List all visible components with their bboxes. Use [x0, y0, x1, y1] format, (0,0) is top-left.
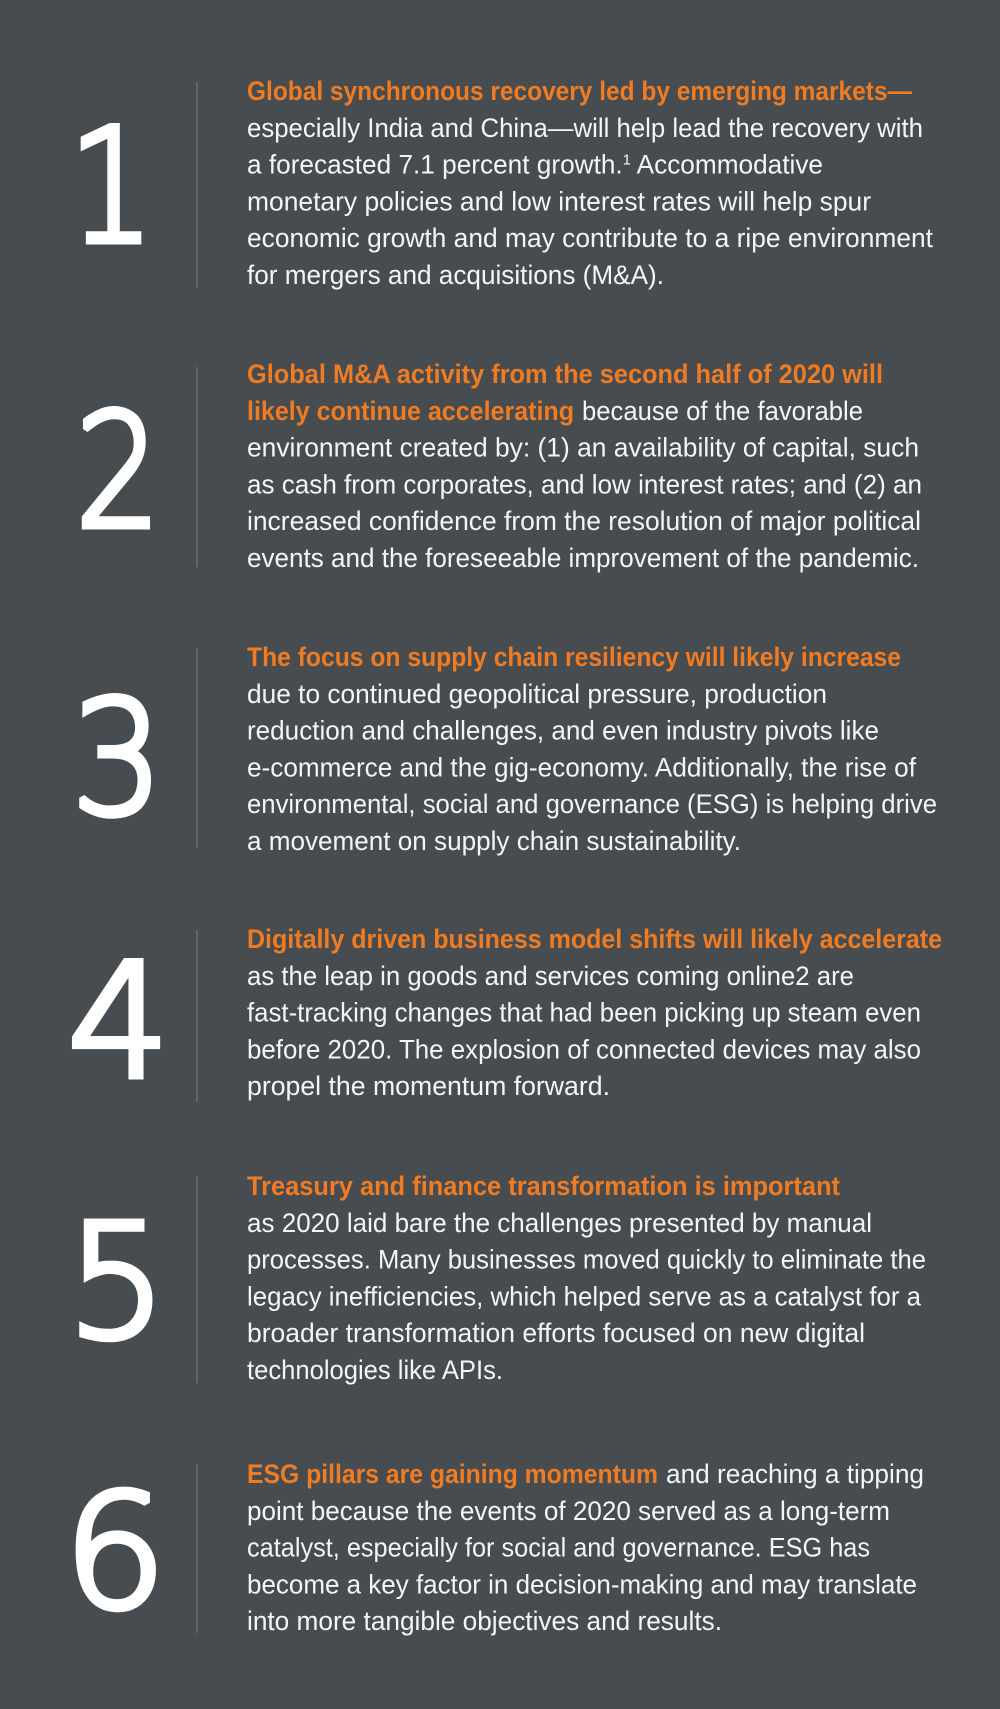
body text 1: a forecasted 7.1 percent growth. — [247, 150, 634, 180]
body text 5 — [247, 1208, 926, 1385]
body text 5: processes. Many businesses moved quickly to eliminate the — [247, 1245, 926, 1275]
body text 1: economic growth and may contribute to a ripe environment — [247, 223, 933, 253]
numeral 4: 4 — [68, 931, 169, 1114]
body text 3: reduction and challenges, and even industry pivots like — [247, 716, 879, 746]
body text 5: legacy inefficiencies, which helped serve as a catalyst for a — [247, 1281, 922, 1311]
body text 6: catalyst, especially for social and governance. ESG has — [247, 1533, 870, 1563]
heading 4: Digitally driven business model shifts will likely accelerate — [247, 924, 942, 954]
body text 3 — [247, 679, 937, 856]
body text 6: into more tangible objectives and results. — [247, 1606, 722, 1636]
heading 6: ESG pillars are gaining momentum — [247, 1459, 658, 1489]
panel: item 3 — [72, 642, 937, 856]
panel: item 6 — [64, 1459, 924, 1644]
body text 2: environment created by: (1) an availability of capital, such — [247, 433, 919, 463]
heading 2: Global M&A activity from the second half of 2020 will — [247, 359, 883, 389]
heading 5: Treasury and finance transformation is important — [247, 1171, 840, 1201]
body text 2: events and the foreseeable improvement of the pandemic. — [247, 543, 919, 573]
body text 2 — [247, 396, 922, 573]
body text 4: before 2020. The explosion of connected devices may also — [247, 1034, 921, 1064]
body text 2: increased confidence from the resolution of major political — [247, 506, 921, 536]
body text 6 — [247, 1459, 924, 1636]
body text 3: due to continued geopolitical pressure, production — [247, 679, 827, 709]
body text 1: 1 — [623, 152, 631, 169]
body text 6: become a key factor in decision-making and may translate — [247, 1569, 917, 1599]
body text 1 — [247, 113, 933, 290]
body text 5: technologies like APIs. — [247, 1355, 503, 1385]
body text 5: broader transformation efforts focused on new digital — [247, 1318, 865, 1348]
body text 1: especially India and China—will help lead the recovery with — [247, 113, 923, 143]
body text 1: monetary policies and low interest rates will help spur — [247, 186, 871, 216]
numeral 5: 5 — [67, 1191, 166, 1374]
heading 2 — [247, 359, 883, 426]
body text 4: as the leap in goods and services coming online2 are — [247, 961, 854, 991]
body text 4: propel the momentum forward. — [247, 1071, 610, 1101]
heading 1: Global synchronous recovery led by emerging markets— — [247, 76, 912, 106]
heading 2: likely continue accelerating — [247, 396, 574, 426]
body text 6: and reaching a tipping — [666, 1459, 924, 1489]
body text 1: Accommodative — [631, 150, 823, 180]
heading 3: The focus on supply chain resiliency will likely increase — [247, 642, 901, 672]
panel: item 4 — [68, 924, 942, 1114]
numeral 3: 3 — [72, 668, 163, 851]
body text 4 — [247, 961, 921, 1101]
body text 3: e-commerce and the gig-economy. Additionally, the rise of — [247, 752, 916, 782]
body text 1: for mergers and acquisitions (M&A). — [247, 260, 664, 290]
panel: item 2 — [76, 359, 922, 573]
body text 3: environmental, social and governance (ESG) is helping drive — [247, 789, 937, 819]
body text 2: as cash from corporates, and low interest rates; and (2) an — [247, 469, 922, 499]
body text 4: fast-tracking changes that had been picking up steam even — [247, 998, 921, 1028]
body text 5: as 2020 laid bare the challenges presented by manual — [247, 1208, 872, 1238]
body text 6: point because the events of 2020 served as a long-term — [247, 1496, 890, 1526]
numeral 6: 6 — [64, 1461, 166, 1644]
numeral 2: 2 — [76, 382, 160, 564]
panel: item 5 — [67, 1171, 926, 1385]
body text 2: because of the favorable — [582, 396, 863, 426]
numeral 1: 1 — [69, 97, 154, 279]
body text 3: a movement on supply chain sustainability. — [247, 826, 741, 856]
panel: item 1 — [69, 76, 933, 290]
